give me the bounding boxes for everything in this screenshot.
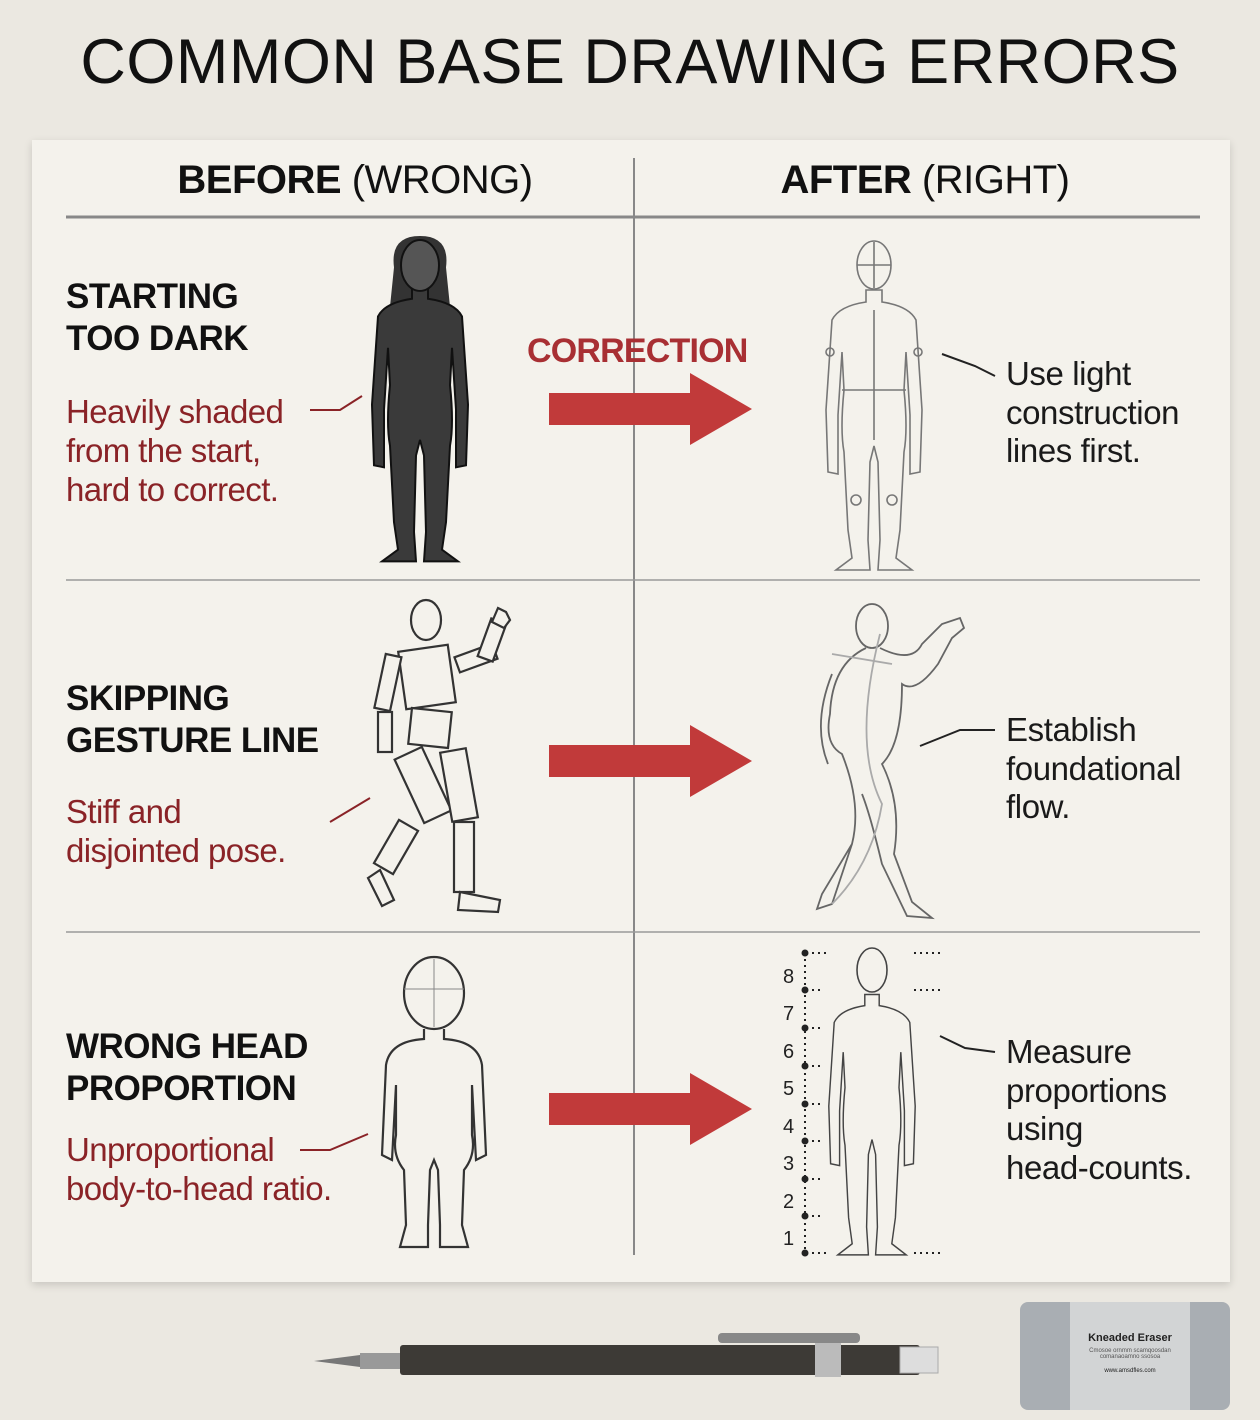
arrow 3	[549, 1073, 752, 1145]
row 1 text	[66, 277, 283, 508]
ruler: 5	[783, 1078, 794, 1100]
figure: child	[382, 957, 486, 1247]
row 3 text: body-to-head ratio.	[66, 1170, 332, 1207]
right text 1: construction	[1006, 394, 1179, 430]
right text 2: Establish	[1006, 711, 1136, 748]
row 2 text: SKIPPING	[66, 679, 229, 718]
row 1 text: from the start,	[66, 432, 261, 469]
row 3 text: Unproportional	[66, 1131, 274, 1168]
ruler: 4	[783, 1116, 794, 1138]
heading: after: AFTER (RIGHT)	[780, 158, 1070, 202]
ruler	[783, 950, 940, 1256]
row 1 text: TOO DARK	[66, 319, 248, 358]
right text 1: Use light	[1006, 355, 1131, 392]
ruler: 6	[783, 1041, 794, 1063]
row 1 text: Heavily shaded	[66, 393, 283, 430]
row 2 text: disjointed pose.	[66, 832, 286, 869]
correction label: CORRECTION	[527, 332, 748, 370]
eraser: Kneaded Eraser	[1088, 1332, 1172, 1344]
figure: gesture	[817, 604, 964, 918]
right text 3: head-counts.	[1006, 1148, 1192, 1186]
row 2 text	[66, 679, 319, 869]
arrow 1	[549, 373, 752, 445]
row 1 text: STARTING	[66, 277, 238, 316]
callout lines	[300, 354, 995, 1150]
row 1 text: hard to correct.	[66, 471, 278, 508]
figure: dark	[372, 236, 468, 561]
pencil	[314, 1333, 938, 1377]
title: COMMON BASE DRAWING ERRORS	[80, 27, 1180, 97]
eraser: www.amsdfles.com	[1104, 1368, 1156, 1374]
ruler: 2	[783, 1191, 794, 1213]
right text 3: Measure	[1006, 1033, 1132, 1070]
ruler: 7	[783, 1003, 794, 1025]
row 3 text: PROPORTION	[66, 1069, 296, 1108]
heading: before: BEFORE (WRONG)	[177, 158, 533, 202]
figure: proportioned with ruler	[829, 948, 915, 1255]
row 3 text	[66, 1027, 332, 1207]
ruler: 3	[783, 1153, 794, 1175]
figure: light mannequin	[826, 241, 922, 570]
row 2 text: GESTURE LINE	[66, 721, 319, 760]
row 3 text: WRONG HEAD	[66, 1027, 308, 1066]
right text 2	[1006, 711, 1181, 825]
panel: paper	[32, 140, 1230, 1282]
row 2 text: Stiff and	[66, 793, 181, 830]
right text 3: using	[1006, 1110, 1083, 1147]
right text 3: proportions	[1006, 1072, 1167, 1108]
figure: blocky	[368, 600, 510, 912]
right text 2: foundational	[1006, 750, 1181, 786]
ruler: 1	[783, 1228, 794, 1250]
eraser: comanaoamno ssosoa	[1100, 1354, 1160, 1360]
right text 3	[1006, 1033, 1192, 1186]
eraser	[1020, 1302, 1230, 1410]
right text 1	[1006, 355, 1179, 469]
ruler: 8	[783, 966, 794, 988]
eraser: Cmosoe ornmm scamqoosdan	[1089, 1348, 1171, 1354]
right text 2: flow.	[1006, 788, 1070, 825]
arrow 2	[549, 725, 752, 797]
right text 1: lines first.	[1006, 432, 1141, 469]
